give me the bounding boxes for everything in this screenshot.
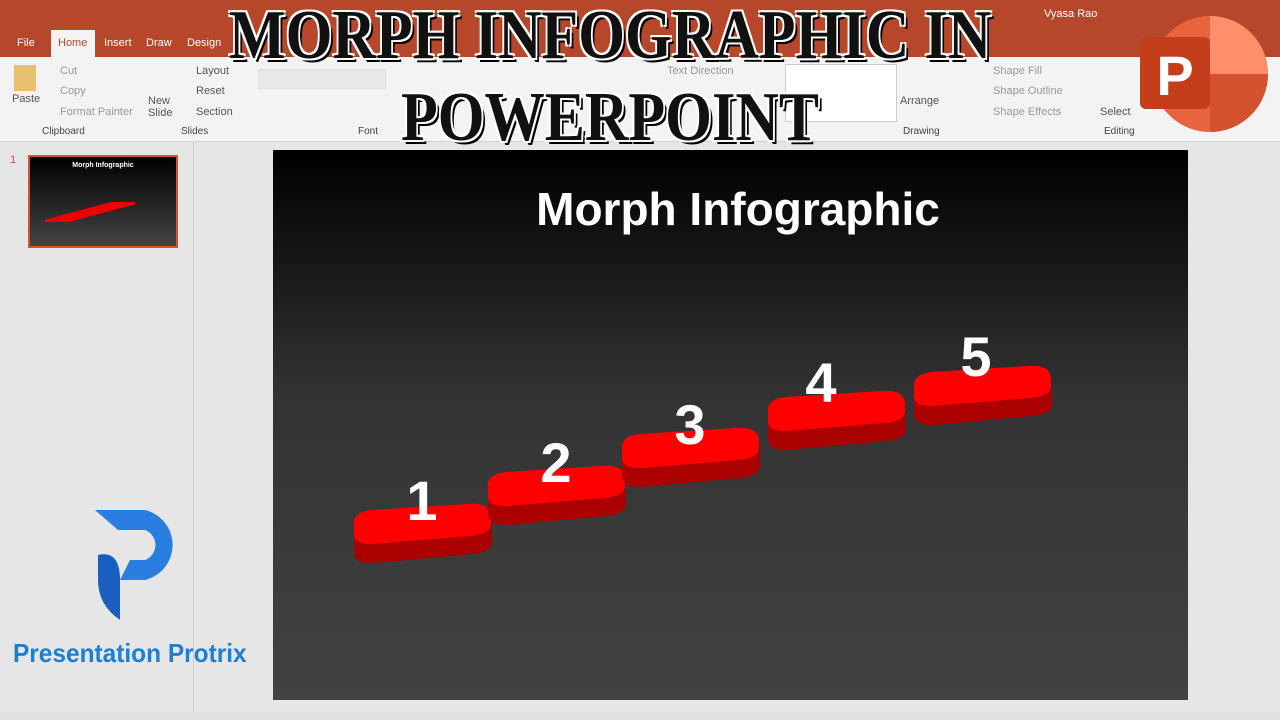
step 2 <box>488 431 626 526</box>
tabs: File <box>17 37 35 49</box>
logo: Presentation Protrix: Presentation Protrix <box>13 638 247 668</box>
left thumbnail pane: 1 <box>10 154 16 166</box>
logo: Presentation Protrix <box>13 510 247 668</box>
text: Editing <box>1104 126 1135 137</box>
step 5: 5 <box>960 325 992 388</box>
ribbon: Format Painter <box>60 106 133 118</box>
title bar: Vyasa Rao <box>1044 8 1097 20</box>
text: Font <box>358 126 378 137</box>
headline: POWERPOINT <box>401 79 819 156</box>
title bar <box>0 0 1280 57</box>
ribbon: Arrange <box>900 95 939 107</box>
ribbon: Shape Fill <box>993 65 1042 77</box>
ribbon: New <box>148 95 170 107</box>
title bar: Design <box>187 37 221 49</box>
ribbon: Section <box>196 106 233 118</box>
step 1 <box>354 469 492 564</box>
step 5 <box>914 325 1052 426</box>
title bar: Home <box>58 37 87 49</box>
step 4: 4 <box>805 351 837 414</box>
ribbon: Cut <box>60 65 77 77</box>
step 4 <box>768 351 906 450</box>
slide <box>273 150 1188 700</box>
headline <box>228 0 994 156</box>
ribbon: Shape Outline <box>993 85 1063 97</box>
step 1: 1 <box>406 469 438 532</box>
ribbon: Shape Effects <box>993 106 1061 118</box>
left thumbnail pane <box>0 142 194 720</box>
ribbon: Slide <box>148 107 172 119</box>
ribbon <box>0 57 1280 142</box>
ribbon: Select <box>1100 106 1131 118</box>
ribbon: Layout <box>196 65 229 77</box>
ribbon: Copy <box>60 85 86 97</box>
steps <box>354 325 1052 564</box>
ribbon: Text Direction <box>667 65 734 77</box>
slide thumbnail: Morph Infographic <box>72 162 134 169</box>
powerpoint logo: P <box>1156 44 1194 107</box>
text: Clipboard <box>42 126 85 137</box>
text: Drawing <box>903 126 940 137</box>
step 3: 3 <box>674 393 706 456</box>
slide title: Morph Infographic <box>536 183 940 235</box>
ribbon: Reset <box>196 85 225 97</box>
text: Slides <box>181 126 208 137</box>
step 2: 2 <box>540 431 572 494</box>
status bar <box>0 712 1280 720</box>
title bar: Insert <box>104 37 132 49</box>
title bar: Draw <box>146 37 172 49</box>
step 3 <box>622 393 760 488</box>
slide thumbnail <box>28 155 178 248</box>
powerpoint logo <box>1140 16 1268 132</box>
ribbon: Paste <box>12 93 40 105</box>
